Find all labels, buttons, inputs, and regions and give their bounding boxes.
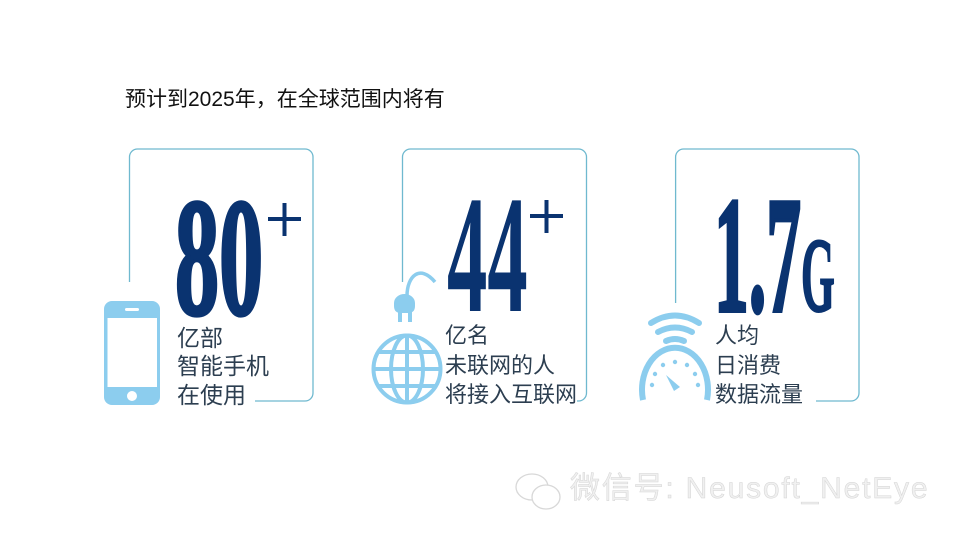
label: 日消费 xyxy=(715,353,781,378)
watermark xyxy=(516,472,929,509)
number: 1.7: 1.7 xyxy=(714,164,801,348)
label: 在使用 xyxy=(177,382,246,408)
panel: daily data xyxy=(642,149,859,407)
label: 亿部 xyxy=(177,325,223,351)
panel frame xyxy=(130,149,313,401)
label: 未联网的人 xyxy=(445,353,555,378)
panel: smartphones xyxy=(104,149,313,408)
icon: gauge xyxy=(642,348,708,400)
panel frame xyxy=(676,149,859,401)
label: 人均 xyxy=(715,323,759,348)
panel frame xyxy=(402,149,586,401)
label: 将接入互联网 xyxy=(445,382,577,407)
label: 亿名 xyxy=(445,323,489,348)
icon: wifi xyxy=(651,316,699,341)
icon: phone xyxy=(104,301,160,405)
plus sign xyxy=(268,203,301,236)
icon: chat bubbles xyxy=(516,474,560,509)
icon: globe xyxy=(374,336,440,402)
panel: unconnected people xyxy=(374,149,586,407)
number: 80: 80 xyxy=(175,165,263,352)
plus sign xyxy=(530,200,563,233)
watermark text: 微信号: Neusoft_NetEye xyxy=(570,472,929,505)
number: 44: 44 xyxy=(447,162,528,348)
label: 数据流量 xyxy=(715,382,803,407)
unit: G: G xyxy=(801,217,835,335)
label: 智能手机 xyxy=(177,353,269,379)
title: 预计到2025年，在全球范围内将有 xyxy=(125,88,445,111)
icon: plug xyxy=(394,273,435,322)
